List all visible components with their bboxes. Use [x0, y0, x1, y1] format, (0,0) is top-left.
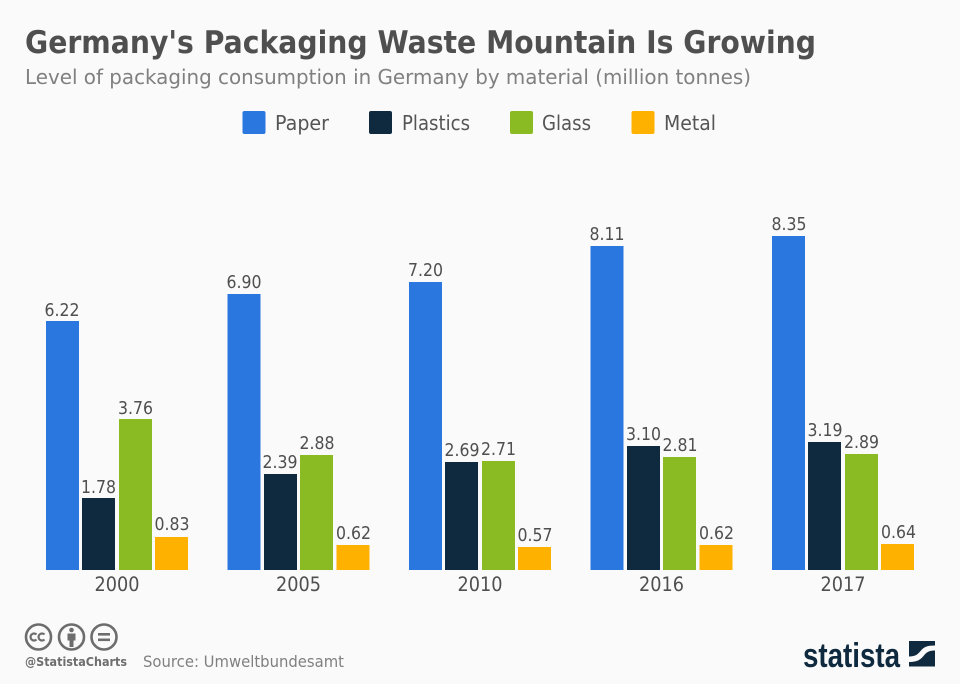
legend item: Plastics: [369, 111, 470, 135]
logo: statista: statista: [803, 637, 901, 675]
group: 2017: 2.89: [844, 432, 879, 453]
group: 2010: 2.71: [481, 439, 516, 460]
legend item: Paper: Paper: [275, 111, 330, 135]
source: Source: Umweltbundesamt: [143, 652, 344, 671]
legend item: Paper: [242, 111, 330, 135]
group: 2017: 8.35: [772, 214, 806, 235]
group: 2016: 3.10: [626, 424, 661, 445]
legend item: Metal: Metal: [664, 111, 716, 135]
group: 2000: [44, 300, 190, 596]
credit handle: @StatistaCharts: [25, 654, 127, 669]
group: 2016: [590, 224, 734, 596]
group: 2005: [226, 272, 371, 596]
group: 2016: 2016: [639, 573, 684, 596]
group: 2017: 0.64: [881, 522, 916, 543]
group: 2005: 2005: [276, 573, 321, 596]
group: 2000: 0.83: [154, 514, 190, 535]
bar chart: [44, 214, 916, 596]
icon: creative commons: [26, 624, 51, 650]
group: 2010: 0.57: [518, 525, 552, 546]
group: 2010: [408, 260, 552, 596]
group: 2000: 2000: [94, 573, 140, 596]
group: 2000: 1.78: [81, 477, 116, 498]
icon: attribution: [59, 624, 84, 650]
icon: no derivatives: [92, 624, 116, 650]
legend item: Metal: [632, 111, 716, 135]
group: 2005: 6.90: [226, 272, 262, 293]
group: 2010: 2010: [458, 573, 502, 596]
group: 2005: 0.62: [336, 523, 371, 544]
group: 2017: [772, 214, 916, 596]
group: 2000: 6.22: [44, 300, 80, 321]
group: 2016: 2.81: [662, 435, 698, 456]
group: 2005: 2.39: [262, 452, 298, 473]
subtitle: Level of packaging consumption in Germany by material (million tonnes): [25, 65, 751, 89]
legend item: Plastics: Plastics: [402, 111, 470, 135]
legend: [242, 111, 716, 135]
legend item: Glass: Glass: [542, 111, 591, 135]
group: 2010: 7.20: [408, 260, 443, 281]
group: 2010: 2.69: [444, 440, 480, 461]
group: 2000: 3.76: [118, 398, 153, 419]
group: 2005: 2.88: [300, 433, 334, 454]
title: Germany's Packaging Waste Mountain Is Growing: [25, 25, 816, 61]
group: 2017: 2017: [820, 573, 866, 596]
group: 2017: 3.19: [808, 420, 842, 441]
legend item: Glass: [510, 111, 591, 135]
group: 2016: 8.11: [590, 224, 624, 245]
group: 2016: 0.62: [699, 523, 734, 544]
